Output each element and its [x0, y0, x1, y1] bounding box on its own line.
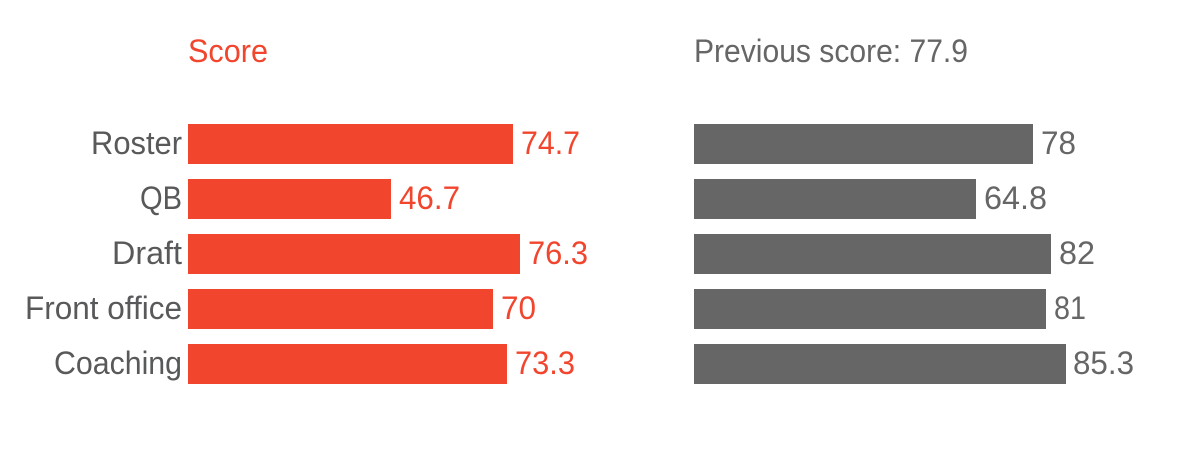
- bar chart: previous score: [694, 124, 1134, 384]
- category labels: [25, 125, 182, 381]
- label: Draft: Draft: [112, 235, 182, 271]
- value: 82: 82: [1059, 235, 1095, 271]
- bar: Roster 74.7: [188, 124, 513, 164]
- value: 74.7: 74.7: [521, 125, 580, 161]
- bar: Front office 70: [188, 289, 493, 329]
- bar: Roster 78: [694, 124, 1033, 164]
- value: 76.3: 76.3: [528, 235, 588, 271]
- label: Front office: Front office: [25, 290, 182, 326]
- heading: Score: Score: [188, 33, 268, 69]
- bar: QB 46.7: [188, 179, 391, 219]
- value: 85.3: 85.3: [1073, 345, 1134, 381]
- value: 46.7: 46.7: [399, 180, 460, 216]
- label: Coaching: Coaching: [54, 345, 182, 381]
- value: 70: 70: [501, 290, 536, 326]
- value: 64.8: 64.8: [984, 180, 1047, 216]
- value: 73.3: 73.3: [515, 345, 575, 381]
- value: 81: 81: [1054, 290, 1086, 326]
- label: Roster: Roster: [91, 125, 182, 161]
- bar chart: score: [188, 124, 588, 384]
- bar: Coaching 73.3: [188, 344, 507, 384]
- bar: Coaching 85.3: [694, 344, 1066, 384]
- value: 78: 78: [1041, 125, 1076, 161]
- bar: Front office 81: [694, 289, 1046, 329]
- bar: QB 64.8: [694, 179, 976, 219]
- bar: Draft 76.3: [188, 234, 520, 274]
- label: QB: QB: [140, 180, 182, 216]
- bar: Draft 82: [694, 234, 1051, 274]
- heading: Previous score: Previous score: 77.9: [694, 33, 968, 69]
